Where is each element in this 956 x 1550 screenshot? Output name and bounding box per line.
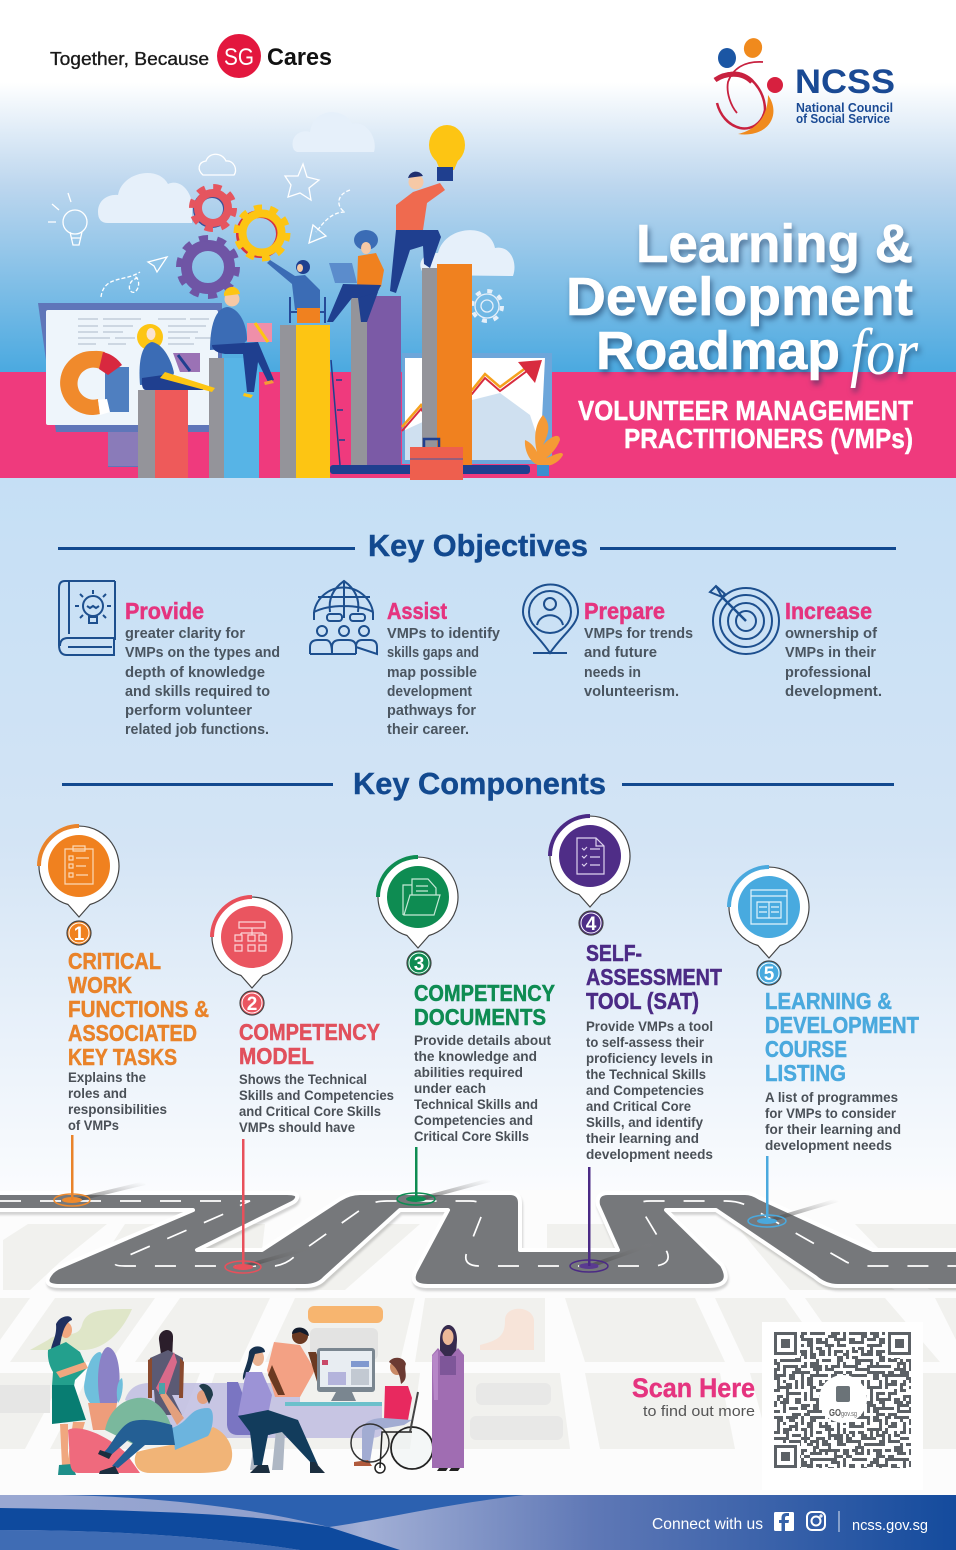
component 1: Critical Work Functions: KEY TASKS [68, 1044, 177, 1070]
heading: Key Components: Key Components [353, 766, 606, 801]
component 3: Competency Documents: Competencies and [414, 1112, 533, 1128]
office chair [227, 1382, 273, 1435]
person: man climbing [390, 172, 445, 293]
objective: Increase: VMPs in their [785, 645, 876, 661]
road [0, 1193, 956, 1286]
component 2: Competency Model: Skills and Competencies [239, 1087, 394, 1103]
gear: red [192, 187, 234, 229]
QR code [762, 1322, 923, 1490]
objective: Assist: skills gaps and [387, 645, 479, 661]
component 2: Competency Model: COMPETENCY [239, 1019, 380, 1045]
component 5: Learning & Development Course Listing: LEARNING & [765, 988, 892, 1014]
component 1: Critical Work Functions: of VMPs [68, 1117, 119, 1133]
logo: Together, Because SG Cares: Cares [267, 44, 332, 71]
component 1: Critical Work Functions: responsibilities [68, 1101, 167, 1117]
component 3: Competency Documents: COMPETENCY [414, 980, 555, 1006]
subtitle: PRACTITIONERS (VMPs) [624, 423, 913, 454]
objective: Increase [710, 586, 882, 700]
objective: Provide: Provide [125, 598, 204, 624]
doodles: outline cloud, star, bulb, arrows [48, 154, 350, 297]
number badge: 3 [414, 954, 424, 975]
objective: Prepare [523, 584, 693, 700]
component 4: Self-Assessment Tool: SELF- [586, 940, 642, 966]
icon: location pin with person [523, 584, 578, 653]
component 3: Competency Documents: under each [414, 1080, 486, 1096]
woman at desk [238, 1346, 325, 1473]
logo: NCSS: National Council [796, 100, 893, 115]
person: man reaching gear [267, 260, 325, 323]
objective: Prepare: needs in [584, 665, 641, 681]
person: woman seated on red bar [137, 324, 215, 392]
component 4: Self-Assessment Tool: TOOL (SAT) [586, 988, 699, 1014]
component 4: Self-Assessment Tool: ASSESSMENT [586, 964, 722, 990]
pin marker on road [54, 1135, 145, 1206]
logo: NCSS: of Social Service [796, 111, 890, 126]
component 4: Self-Assessment Tool: their learning and [586, 1130, 699, 1146]
number badge: 1 [74, 924, 85, 945]
component 1: Critical Work Functions: Explains the [68, 1069, 146, 1085]
balloon icon: checklist document [550, 816, 630, 907]
gear: outline [472, 291, 502, 321]
objective: Increase: Increase [785, 598, 872, 624]
lightbulb [429, 125, 465, 181]
person: man seated on blue bar [210, 287, 274, 398]
logo: Together, Because SG Cares: Together, Because [50, 49, 209, 69]
footer: social links: ncss.gov.sg [852, 1517, 928, 1534]
icon: facebook [774, 1512, 794, 1531]
component 5: Learning & Development Course Listing: COURSE [765, 1036, 847, 1062]
number badge [407, 951, 431, 975]
QR code: GO [829, 1408, 841, 1419]
desk backdrop [125, 1383, 382, 1438]
number badge [579, 911, 603, 935]
component 2: Competency Model [212, 897, 394, 1273]
component 4: Self-Assessment Tool: the Technical Skills [586, 1066, 706, 1082]
component 3: Competency Documents: Critical Core Skills [414, 1128, 529, 1144]
title: for [850, 316, 918, 389]
woman in wheelchair [351, 1358, 433, 1473]
component 4: Self-Assessment Tool: to self-assess their [586, 1034, 705, 1050]
objective: Provide: and skills required to [125, 684, 270, 700]
balloon icon: clipboard [39, 826, 119, 917]
objective: Increase: development. [785, 684, 882, 700]
objective: Prepare: Prepare [584, 598, 665, 624]
map accent blocks [0, 1306, 563, 1440]
icon: book with lightbulb [59, 581, 115, 655]
component 3: Competency Documents: Provide details about [414, 1032, 551, 1048]
component 4: Self-Assessment Tool: proficiency levels in [586, 1050, 713, 1066]
man at monitor [267, 1327, 338, 1397]
subtitle [578, 395, 913, 454]
objective: Provide: depth of knowledge [125, 665, 265, 681]
man reclining [98, 1383, 213, 1474]
laptop with chart [402, 353, 552, 464]
plant [84, 1347, 123, 1430]
logo: Together, Because SG Cares: SG [224, 44, 254, 71]
objective: Increase: professional [785, 665, 871, 681]
balloon icon: folder [378, 857, 458, 948]
component 2: Competency Model: Shows the Technical [239, 1071, 367, 1087]
balloon icon: online course book [729, 867, 809, 958]
component 2: Competency Model: MODEL [239, 1043, 314, 1069]
number badge: 2 [247, 994, 257, 1015]
footer: social links: Connect with us [652, 1516, 763, 1533]
objective: Assist: pathways for [387, 703, 476, 719]
pin marker on road [225, 1139, 320, 1273]
people illustration [48, 1316, 464, 1475]
objective: Prepare: and future [584, 645, 657, 661]
component 5: Learning & Development Course Listing [729, 867, 919, 1227]
component 4: Self-Assessment Tool [550, 816, 722, 1272]
component 1: Critical Work Functions: roles and [68, 1085, 127, 1101]
hero illustration [38, 112, 563, 480]
number badge [757, 961, 781, 985]
clouds [98, 112, 514, 276]
icon: globe with people [310, 581, 377, 654]
component 1: Critical Work Functions: CRITICAL [68, 948, 161, 974]
scan here prompt [632, 1373, 755, 1420]
woman in teal [48, 1316, 88, 1475]
component 4: Self-Assessment Tool: development needs [586, 1146, 713, 1162]
scan here prompt: to find out more [643, 1403, 755, 1420]
heading: Key Components [62, 766, 894, 801]
component 4: Self-Assessment Tool: and Competencies [586, 1082, 704, 1098]
title: Development [566, 267, 913, 327]
icon: instagram [807, 1512, 825, 1530]
monitor and desk [285, 1348, 382, 1406]
pin marker on road [570, 1167, 655, 1272]
component 3: Competency Documents: DOCUMENTS [414, 1004, 546, 1030]
number badge [67, 921, 91, 945]
component 5: Learning & Development Course Listing: development needs [765, 1137, 892, 1153]
component 5: Learning & Development Course Listing: A list of programmes [765, 1089, 898, 1105]
beanbag: green [105, 1398, 175, 1445]
subtitle: VOLUNTEER MANAGEMENT [578, 395, 913, 426]
gear: purple [179, 238, 237, 296]
icon: target with arrow [710, 586, 779, 654]
component 3: Competency Documents: the knowledge and [414, 1048, 537, 1064]
QR code: gov.sg [841, 1411, 857, 1418]
footer: social links [652, 1511, 928, 1534]
monitor [38, 303, 222, 467]
title [566, 214, 918, 389]
map background blocks [0, 1224, 956, 1449]
objective: Prepare: volunteerism. [584, 684, 679, 700]
background: lower white area [0, 1190, 956, 1495]
number badge: 4 [586, 914, 597, 935]
objective: Increase: ownership of [785, 626, 877, 642]
beanbag: orange [135, 1427, 232, 1473]
component 3: Competency Documents: abilities required [414, 1064, 523, 1080]
objective: Assist: VMPs to identify [387, 626, 500, 642]
title: Learning & [636, 214, 913, 274]
donut chart [60, 351, 129, 415]
component 5: Learning & Development Course Listing: DEVELOPMENT [765, 1012, 919, 1038]
objective: Provide: VMPs on the types and [125, 645, 280, 661]
bars [138, 390, 155, 478]
briefcase [410, 439, 463, 480]
component 1: Critical Work Functions: ASSOCIATED [68, 1020, 197, 1046]
component 2: Competency Model: VMPs should have [239, 1119, 355, 1135]
component 1: Critical Work Functions [39, 826, 209, 1206]
beanbag: pink [68, 1428, 140, 1473]
logo: Together, Because SG Cares [50, 34, 332, 78]
component 1: Critical Work Functions: FUNCTIONS & [68, 996, 209, 1022]
objective: Assist: development [387, 684, 472, 700]
component 3: Competency Documents [378, 857, 555, 1205]
logo: NCSS [715, 36, 895, 134]
woman in sari [148, 1330, 184, 1415]
objective: Provide [59, 581, 280, 738]
component 1: Critical Work Functions: WORK [68, 972, 132, 998]
component 5: Learning & Development Course Listing: for their learning and [765, 1121, 901, 1137]
heading: Key Objectives: Key Objectives [368, 528, 588, 563]
scan here prompt: Scan Here [632, 1373, 755, 1403]
woman in hijab [432, 1325, 464, 1471]
objective: Provide: greater clarity for [125, 626, 245, 642]
balloon icon: org chart [212, 897, 292, 988]
objective: Prepare: VMPs for trends [584, 626, 693, 642]
number badge: 5 [764, 964, 775, 985]
background: page [0, 478, 956, 1198]
background: hero pink band [0, 372, 956, 478]
component 3: Competency Documents: Technical Skills and [414, 1096, 538, 1112]
logo: NCSS: NCSS [795, 63, 895, 101]
objective: Provide: perform volunteer [125, 703, 252, 719]
plant [525, 415, 563, 476]
component 2: Competency Model: and Critical Core Skills [239, 1103, 381, 1119]
component 4: Self-Assessment Tool: and Critical Core [586, 1098, 691, 1114]
background: hero sky [0, 0, 956, 373]
objective: Assist: map possible [387, 665, 477, 681]
pin marker on road [397, 1147, 490, 1205]
objective: Provide: related job functions. [125, 722, 269, 738]
gear: yellow [236, 208, 288, 258]
person: woman on purple bar with laptop [327, 230, 384, 322]
objective: Assist: Assist [387, 598, 447, 624]
component 4: Self-Assessment Tool: Provide VMPs a tool [586, 1018, 713, 1034]
component 5: Learning & Development Course Listing: LISTING [765, 1060, 846, 1086]
number badge [240, 991, 264, 1015]
objective: Assist [310, 581, 500, 738]
objective: Assist: their career. [387, 722, 469, 738]
pin marker on road [748, 1156, 838, 1227]
title: Roadmap [596, 321, 840, 381]
heading: Key Objectives [58, 528, 896, 563]
footer band [0, 1495, 956, 1550]
component 4: Self-Assessment Tool: Skills, and identify [586, 1114, 703, 1130]
component 5: Learning & Development Course Listing: for VMPs to consider [765, 1105, 897, 1121]
